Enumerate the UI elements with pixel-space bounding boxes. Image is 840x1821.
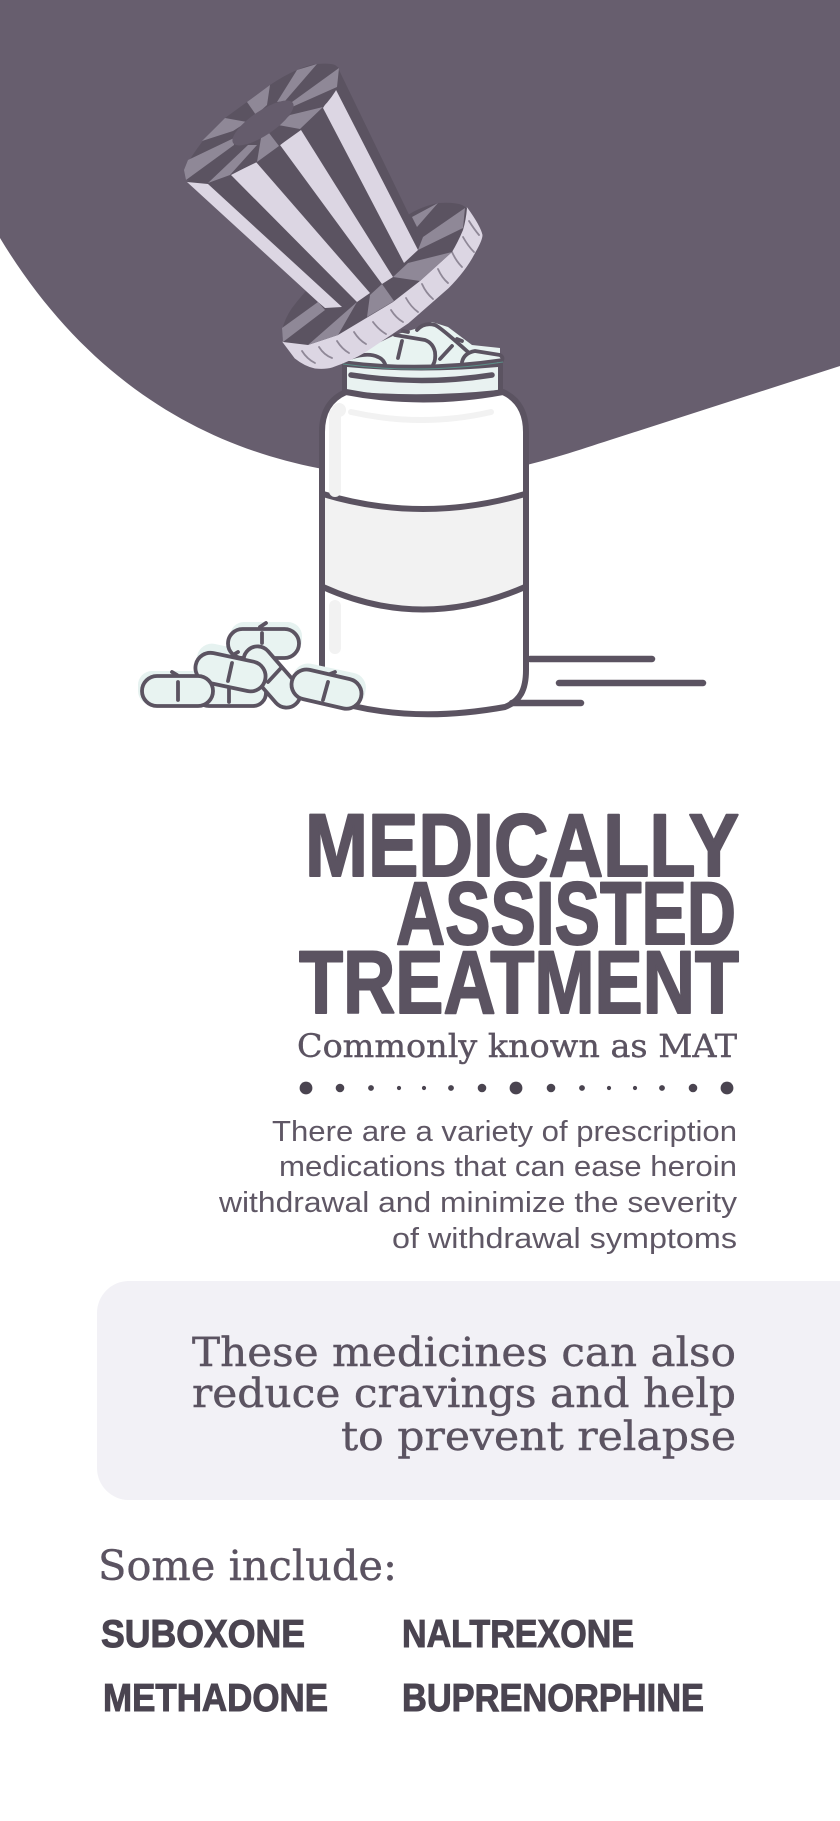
bottle body bbox=[322, 392, 526, 714]
hat top surface bbox=[185, 64, 339, 183]
hat brim wedges bbox=[282, 203, 465, 345]
description text: of withdrawal symptoms bbox=[392, 1223, 737, 1255]
medication list: NALTREXONE bbox=[402, 1613, 634, 1656]
panel background bbox=[97, 1281, 840, 1500]
title: MEDICALLY bbox=[305, 795, 739, 895]
icon: pile of pills bbox=[138, 622, 369, 713]
panel: callout bbox=[97, 1281, 840, 1500]
hat top center bbox=[226, 93, 300, 153]
bottle neck bbox=[342, 360, 503, 402]
hat brim ticks bbox=[302, 221, 479, 363]
description text: medications that can ease heroin bbox=[279, 1151, 737, 1183]
callout text: to prevent relapse bbox=[341, 1414, 736, 1460]
illustration: striped top hat bbox=[184, 64, 482, 368]
title: TREATMENT bbox=[299, 932, 739, 1032]
hat brim rim bbox=[283, 208, 482, 368]
pill: front right bbox=[289, 667, 364, 712]
callout text bbox=[192, 1330, 736, 1460]
pill: diagonal bbox=[238, 641, 306, 713]
bottle highlights bbox=[335, 412, 491, 648]
label border lines bbox=[323, 494, 525, 610]
pill: front left bbox=[142, 672, 213, 706]
hat body bbox=[187, 70, 418, 308]
title: ASSISTED bbox=[396, 863, 736, 963]
medication list: SUBOXONE bbox=[101, 1613, 305, 1656]
subtitle: Commonly known as MAT bbox=[297, 1027, 738, 1065]
pill: bottom behind bbox=[196, 676, 266, 706]
hat top wedges bbox=[184, 64, 339, 183]
pill: top bbox=[228, 623, 299, 658]
title bbox=[299, 795, 739, 1032]
medication list: METHADONE bbox=[103, 1677, 328, 1720]
hat brim surface bbox=[282, 203, 467, 345]
background: dark curved header bbox=[0, 0, 840, 478]
pills inside the bottle bbox=[345, 322, 502, 368]
bottle label band bbox=[325, 495, 523, 609]
speed lines bbox=[512, 659, 703, 703]
pill halos bbox=[138, 622, 369, 709]
illustration: pill bottle bbox=[322, 360, 526, 714]
description text: withdrawal and minimize the severity bbox=[218, 1187, 738, 1219]
pill: left tilted bbox=[193, 650, 268, 694]
callout text: reduce cravings and help bbox=[192, 1371, 736, 1417]
hat stripes bbox=[187, 88, 418, 308]
dotted divider bbox=[300, 1082, 733, 1094]
medication list: BUPRENORPHINE bbox=[402, 1677, 704, 1720]
description text: There are a variety of prescription bbox=[272, 1116, 737, 1148]
callout text: These medicines can also bbox=[192, 1330, 736, 1376]
heading: some include: Some include: bbox=[98, 1542, 397, 1590]
medication list bbox=[101, 1613, 704, 1720]
description text bbox=[218, 1116, 738, 1255]
